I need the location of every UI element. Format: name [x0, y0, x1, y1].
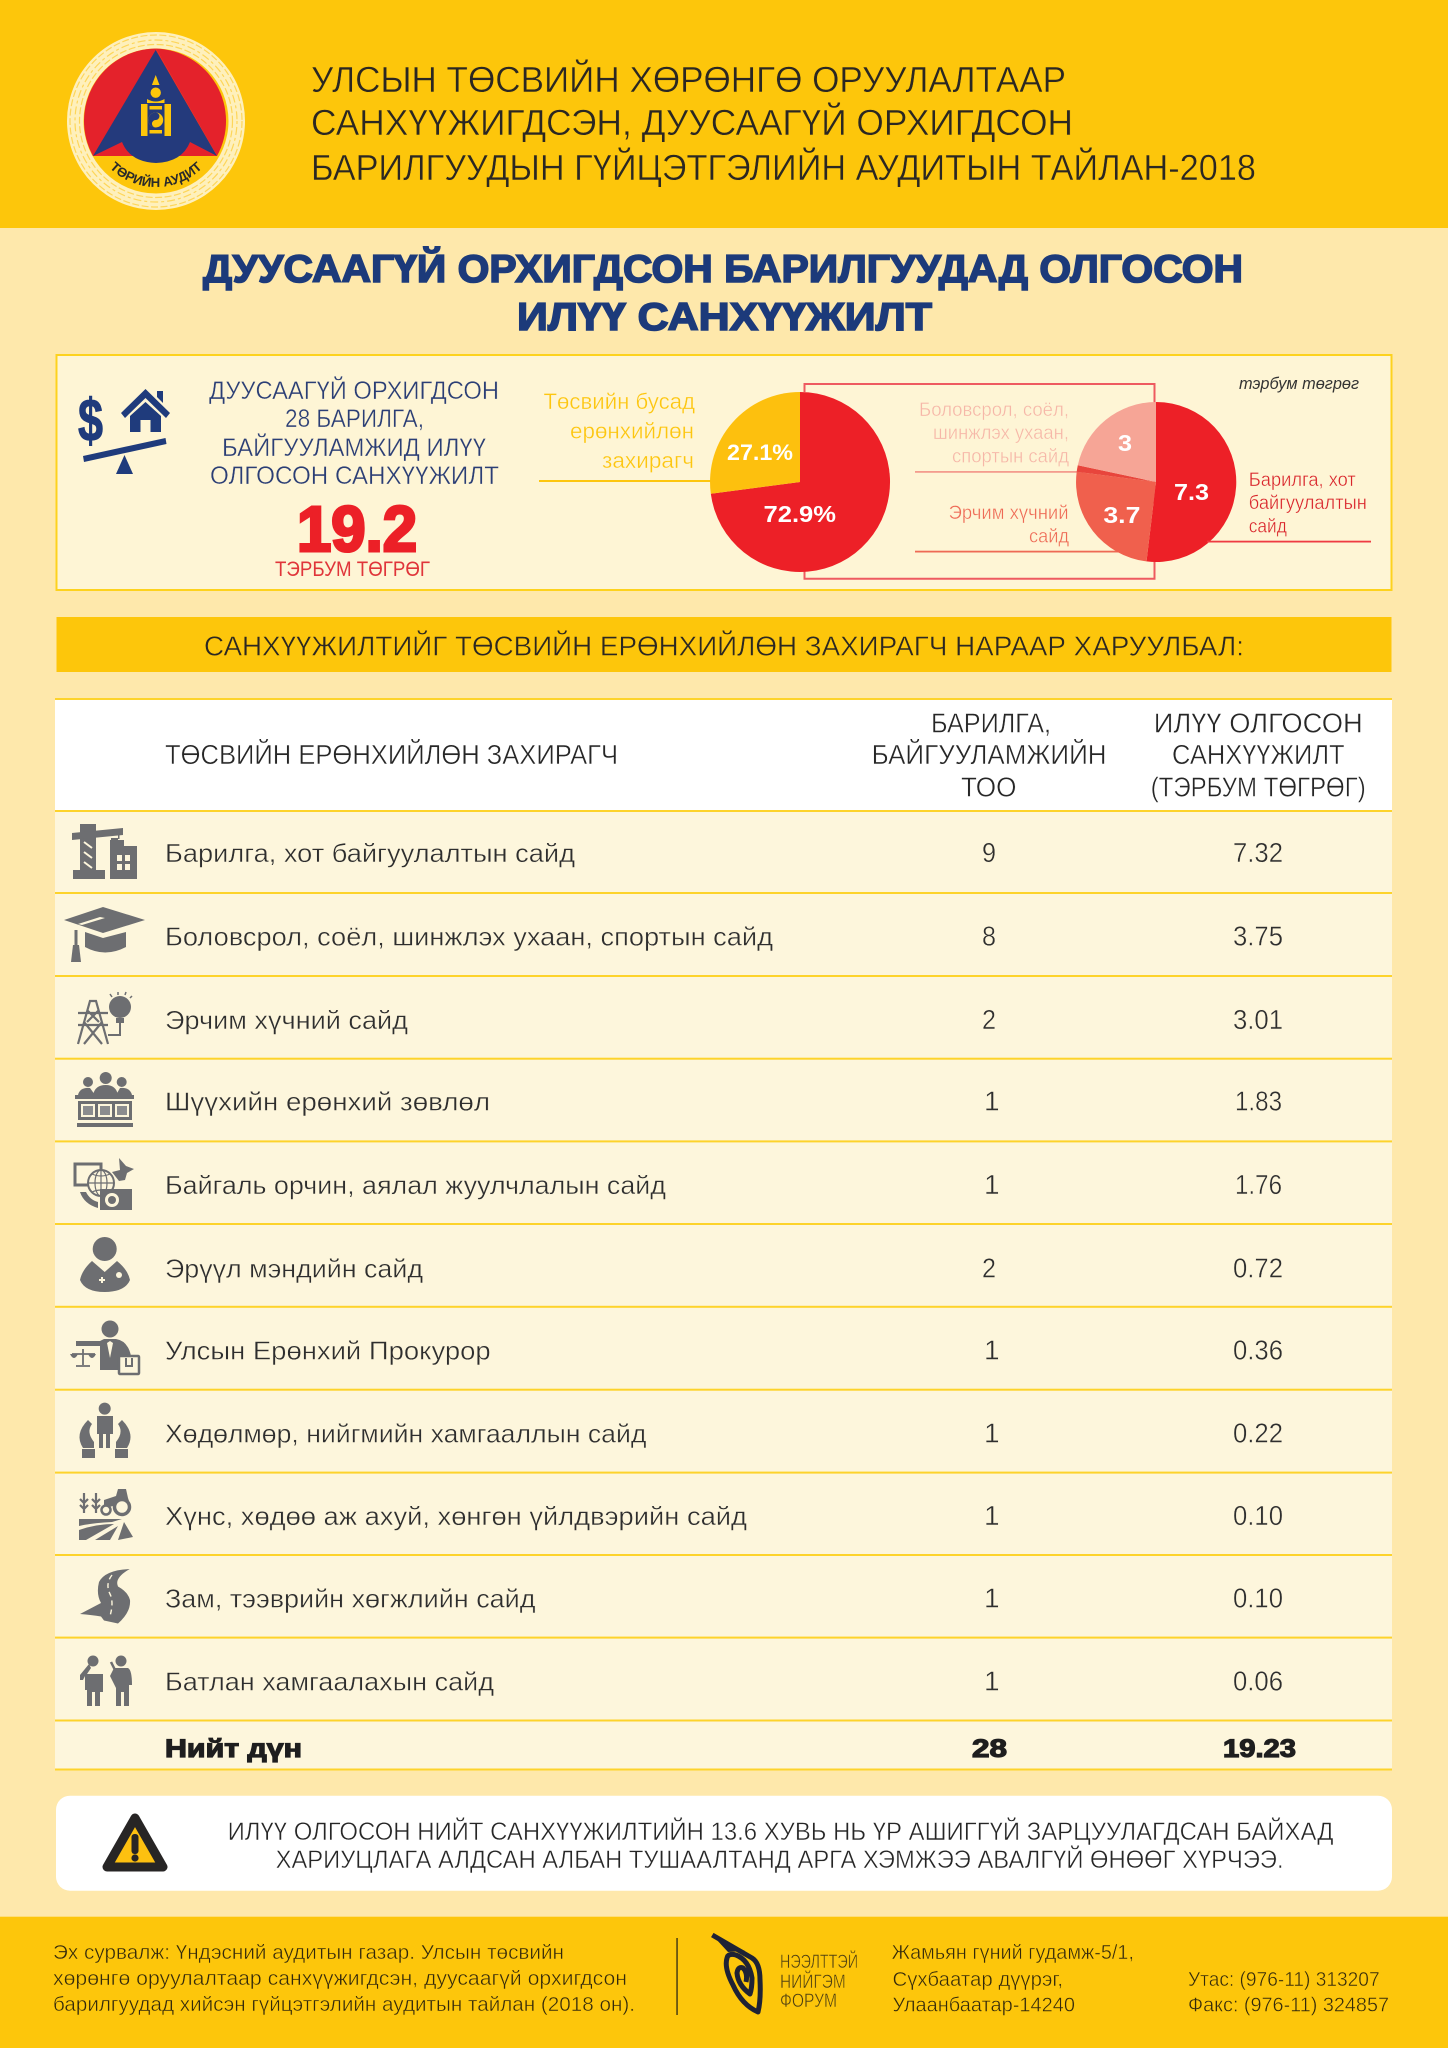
forum name [780, 1951, 858, 2012]
row: construction ministry [72, 824, 1283, 879]
main heading: ИЛҮҮ САНХҮҮЖИЛТ [517, 296, 932, 339]
unit note: тэрбум төгрөг [1239, 374, 1359, 393]
icon: winding road [80, 1569, 130, 1624]
label: education ministry: шинжлэх ухаан, [933, 423, 1069, 444]
phone and fax: Утас: (976-11) 313207 [1188, 1969, 1380, 1991]
logo: open society forum [712, 1935, 760, 2012]
label: other budget managers: ерөнхийлөн [570, 419, 694, 444]
label: construction ministry: сайд [1249, 517, 1287, 538]
pie chart: share of total: 72.9% [764, 501, 836, 527]
summary text [209, 375, 499, 490]
summary text: БАЙГУУЛАМЖИД ИЛҮҮ [222, 432, 486, 462]
row: health ministry: 2 [982, 1252, 996, 1283]
pie chart: breakdown in billion tugrik: 3 [1118, 430, 1132, 456]
icon: prosecutor with scales and briefcase [70, 1320, 139, 1374]
row: health ministry [80, 1237, 1283, 1292]
table header: БАРИЛГА, [931, 708, 1051, 739]
row: prosecutor general: 1 [984, 1334, 1000, 1365]
table header: ТӨСВИЙН ЕРӨНХИЙЛӨН ЗАХИРАГЧ [165, 739, 618, 770]
pie chart: breakdown in billion tugrik: 7.3 [1174, 479, 1209, 505]
pie chart: share of total: 27.1% [727, 440, 793, 465]
row: judicial general council [75, 1072, 1282, 1127]
big number 19.2: 19.2 [297, 493, 417, 565]
header title: УЛСЫН ТӨСВИЙН ХӨРӨНГӨ ОРУУЛАЛТААР [311, 58, 1066, 100]
table header: ТОО [961, 772, 1016, 803]
row: defence ministry [80, 1656, 1283, 1706]
logo: state audit emblem [67, 32, 245, 210]
table [55, 698, 1392, 1770]
forum name: ФОРУМ [780, 1991, 837, 2012]
row: construction ministry: 7.32 [1233, 837, 1283, 868]
row: construction ministry: Барилга, хот байгуулалтын сайд [165, 838, 575, 868]
row: judicial general council: 1 [984, 1086, 1000, 1117]
label: energy ministry: сайд [1029, 527, 1069, 548]
row: environment and tourism ministry: Байгаль орчин, аялал жуулчлалын сайд [165, 1170, 666, 1200]
summary text: ОЛГОСОН САНХҮҮЖИЛТ [210, 462, 499, 490]
phone and fax [1188, 1969, 1389, 2017]
row: health ministry: Эрүүл мэндийн сайд [165, 1253, 423, 1283]
row: environment and tourism ministry: 1 [984, 1169, 1000, 1200]
label: construction ministry: Барилга, хот [1249, 470, 1356, 491]
row: energy ministry: Эрчим хүчний сайд [165, 1005, 408, 1035]
row: roads and transport ministry: Зам, тээврийн хөгжлийн сайд [165, 1584, 536, 1614]
icon: graduation cap [64, 907, 145, 962]
icon: person held by hands [79, 1403, 131, 1458]
label: energy ministry [915, 503, 1125, 552]
icon: council at desk [75, 1072, 134, 1127]
header band [0, 0, 1448, 228]
row: labour and social protection ministry: 1 [984, 1417, 1000, 1448]
label: other budget managers: захирагч [602, 448, 694, 473]
source note: барилгуудад хийсэн гүйцэтгэлийн аудитын тайлан (2018 он). [53, 1994, 635, 2016]
row: education ministry [64, 907, 1283, 962]
address: Жамьян гүний гудамж-5/1, [892, 1942, 1134, 1964]
table header: ИЛҮҮ ОЛГОСОН [1154, 708, 1363, 739]
section band [56, 617, 1392, 672]
row: labour and social protection ministry: 0.22 [1233, 1417, 1283, 1448]
row: food and agriculture ministry [79, 1489, 1283, 1540]
label: construction ministry [1207, 470, 1371, 542]
row: food and agriculture ministry: Хүнс, хөдөө аж ахуй, хөнгөн үйлдвэрийн сайд [165, 1501, 747, 1531]
pie chart: share of total [710, 392, 890, 572]
address [892, 1942, 1134, 2017]
warning text [228, 1816, 1333, 1874]
logo: state audit emblem: ТӨРИЙН АУДИТ [112, 161, 200, 187]
header title [311, 58, 1256, 188]
icon: two soldiers [80, 1656, 132, 1706]
row: roads and transport ministry: 1 [984, 1583, 1000, 1614]
pie chart: breakdown in billion tugrik [1076, 402, 1236, 562]
icon: money and house on a balance: $ [78, 387, 103, 454]
footer [0, 1917, 1448, 2048]
panel: total overfunding summary [56, 355, 1392, 590]
row: food and agriculture ministry: 1 [984, 1500, 1000, 1531]
icon: money and house on a balance [78, 387, 170, 474]
address: Сүхбаатар дүүрэг, [892, 1969, 1063, 1991]
table header: БАЙГУУЛАМЖИЙН [872, 739, 1107, 770]
row: defence ministry: 1 [984, 1666, 1000, 1697]
icon: warning triangle [107, 1818, 163, 1867]
row: environment and tourism ministry: 1.76 [1235, 1169, 1282, 1200]
summary text: ДУУСААГҮЙ ОРХИГДСОН [209, 375, 499, 405]
forum name: НИЙГЭМ [780, 1971, 846, 1993]
row: total: Нийт дүн [165, 1735, 302, 1763]
warning text: ХАРИУЦЛАГА АЛДСАН АЛБАН ТУШААЛТАНД АРГА ХЭМЖЭЭ АВАЛГҮЙ ӨНӨӨГ ХҮРЧЭЭ. [276, 1844, 1284, 1874]
row: education ministry: 3.75 [1233, 921, 1283, 952]
label: education ministry [915, 400, 1105, 473]
row: roads and transport ministry: 0.10 [1233, 1583, 1283, 1614]
row: food and agriculture ministry: 0.10 [1233, 1500, 1283, 1531]
row: environment and tourism ministry [75, 1158, 1282, 1210]
row: labour and social protection ministry [79, 1403, 1283, 1458]
row: judicial general council: Шүүхийн ерөнхий зөвлөл [165, 1087, 490, 1117]
header title: БАРИЛГУУДЫН ГҮЙЦЭТГЭЛИЙН АУДИТЫН ТАЙЛАН-2018 [311, 146, 1256, 188]
icon: power tower and bulb [78, 992, 132, 1044]
row: energy ministry: 2 [982, 1004, 996, 1035]
source note: Эх сурвалж: Үндэсний аудитын газар. Улсын төсвийн [53, 1942, 564, 1964]
row: prosecutor general: Улсын Ерөнхий Прокурор [165, 1335, 491, 1365]
row: prosecutor general: 0.36 [1233, 1334, 1283, 1365]
label: education ministry: спортын сайд [952, 446, 1069, 468]
row: judicial general council: 1.83 [1235, 1086, 1282, 1117]
source note [53, 1942, 635, 2016]
label: education ministry: Боловсрол, соёл, [919, 400, 1069, 421]
row: energy ministry: 3.01 [1233, 1004, 1283, 1035]
callout: warning [56, 1796, 1392, 1891]
row: defence ministry: Батлан хамгаалахын сайд [165, 1667, 494, 1697]
label: other budget managers [539, 389, 711, 482]
row: total: 19.23 [1223, 1735, 1296, 1763]
table header [165, 708, 1366, 803]
row: labour and social protection ministry: Хөдөлмөр, нийгмийн хамгааллын сайд [165, 1418, 646, 1448]
label: construction ministry: байгуулалтын [1249, 493, 1367, 514]
label: energy ministry: Эрчим хүчний [949, 503, 1069, 524]
connector bracket between pies [804, 384, 1154, 579]
row: total [165, 1735, 1296, 1763]
warning text: ИЛҮҮ ОЛГОСОН НИЙТ САНХҮҮЖИЛТИЙН 13.6 ХУВЬ НЬ ҮР АШИГГҮЙ ЗАРЦУУЛАГДСАН БАЙХАД [228, 1816, 1333, 1846]
label: other budget managers: Төсвийн бусад [544, 389, 695, 414]
row: education ministry: 8 [982, 921, 996, 952]
row: total: 28 [972, 1735, 1007, 1763]
address: Улаанбаатар-14240 [892, 1995, 1075, 2017]
row: defence ministry: 0.06 [1233, 1666, 1283, 1697]
phone and fax: Факс: (976-11) 324857 [1188, 1995, 1389, 2017]
row: education ministry: Боловсрол, соёл, шинжлэх ухаан, спортын сайд [165, 922, 773, 952]
summary text: 28 БАРИЛГА, [285, 405, 424, 433]
source note: хөрөнгө оруулалтаар санхүүжигдсэн, дуусаагүй орхигдсон [53, 1968, 627, 1990]
table header: (ТЭРБУМ ТӨГРӨГ) [1151, 772, 1366, 803]
row: roads and transport ministry [80, 1569, 1283, 1624]
forum name: НЭЭЛТТЭЙ [780, 1951, 858, 1973]
main heading: ДУУСААГҮЙ ОРХИГДСОН БАРИЛГУУДАД ОЛГОСОН [203, 246, 1243, 291]
main heading [203, 246, 1243, 339]
row: health ministry: 0.72 [1233, 1252, 1283, 1283]
icon: globe, camera and butterfly [75, 1158, 134, 1210]
header title: САНХҮҮЖИГДСЭН, ДУУСААГҮЙ ОРХИГДСОН [311, 101, 1073, 143]
row: prosecutor general [70, 1320, 1283, 1374]
row: energy ministry [78, 992, 1283, 1044]
icon: crane and building [72, 824, 137, 879]
icon: doctor [80, 1237, 130, 1292]
table header: САНХҮҮЖИЛТ [1172, 739, 1345, 770]
unit label: ТЭРБУМ ТӨГРӨГ [275, 558, 430, 581]
icon: wheat, tractor and fields [79, 1489, 133, 1540]
section band: САНХҮҮЖИЛТИЙГ ТӨСВИЙН ЕРӨНХИЙЛӨН ЗАХИРАГЧ НАРААР ХАРУУЛБАЛ: [204, 631, 1244, 662]
row: construction ministry: 9 [982, 837, 996, 868]
pie chart: breakdown in billion tugrik: 3.7 [1103, 502, 1140, 528]
